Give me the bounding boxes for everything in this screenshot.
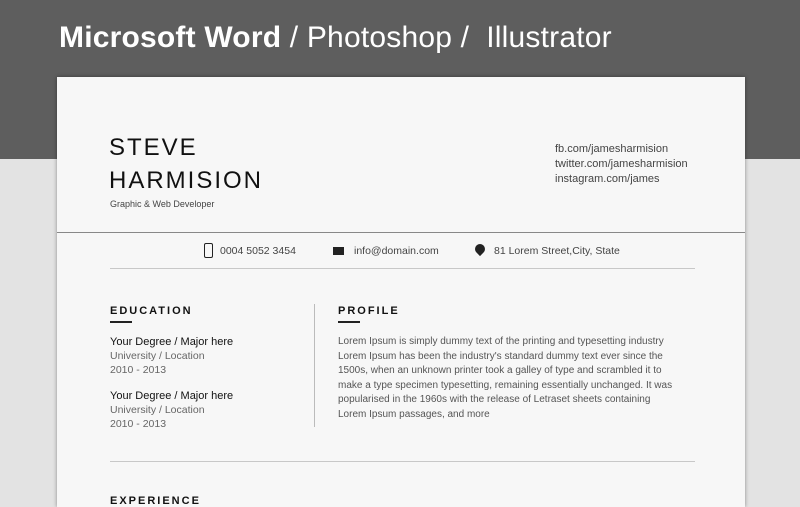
contact row: [204, 243, 620, 258]
icon: location pin: [473, 242, 487, 256]
panel: education: University / Location: [110, 404, 205, 416]
panel: education: Your Degree / Major here: [110, 336, 233, 348]
panel: profile: popularised in the 1960s with the release of Letraset sheets containing: [338, 394, 650, 405]
name: [109, 134, 263, 194]
icon: email: [333, 247, 344, 255]
contact row: 0004 5052 3454: [220, 245, 296, 257]
top dark band: [0, 0, 800, 159]
panel: profile: Lorem Ipsum is simply dummy text of the printing and typesetting industry: [338, 336, 664, 347]
panel: education: [110, 305, 233, 430]
contact row: info@domain.com: [354, 245, 439, 257]
panel: profile: PROFILE: [338, 305, 400, 317]
name: STEVE: [109, 134, 198, 161]
social links: twitter.com/jamesharmision: [555, 158, 688, 170]
panel: profile: Lorem Ipsum has been the industry's standard dummy text ever since the: [338, 351, 663, 362]
social links: [555, 143, 688, 185]
panel: profile: make a type specimen typesetting, remaining essentially unchanged. It was: [338, 380, 672, 391]
panel: education: 2010 - 2013: [110, 364, 166, 376]
panel: education: University / Location: [110, 350, 205, 362]
name: HARMISION: [109, 167, 263, 194]
social links: fb.com/jamesharmision: [555, 143, 668, 155]
icon: phone: [204, 243, 213, 258]
job title: Graphic & Web Developer: [110, 199, 214, 209]
panel: profile: [338, 305, 672, 420]
title: Microsoft Word / Photoshop / Illustrator: [59, 21, 612, 54]
panel: profile: Lorem Ipsum passages, and more: [338, 409, 490, 420]
social links: instagram.com/james: [555, 173, 660, 185]
header divider: [57, 232, 745, 233]
panel: education: EDUCATION: [110, 305, 193, 317]
panel: profile: 1500s, when an unknown printer took a galley of type and scrambled it to: [338, 365, 662, 376]
experience heading: EXPERIENCE: [110, 495, 201, 507]
contact row: 81 Lorem Street,City, State: [494, 245, 620, 257]
panel: education: 2010 - 2013: [110, 418, 166, 430]
panel: education: Your Degree / Major here: [110, 390, 233, 402]
panel: resume paper: [57, 77, 745, 507]
